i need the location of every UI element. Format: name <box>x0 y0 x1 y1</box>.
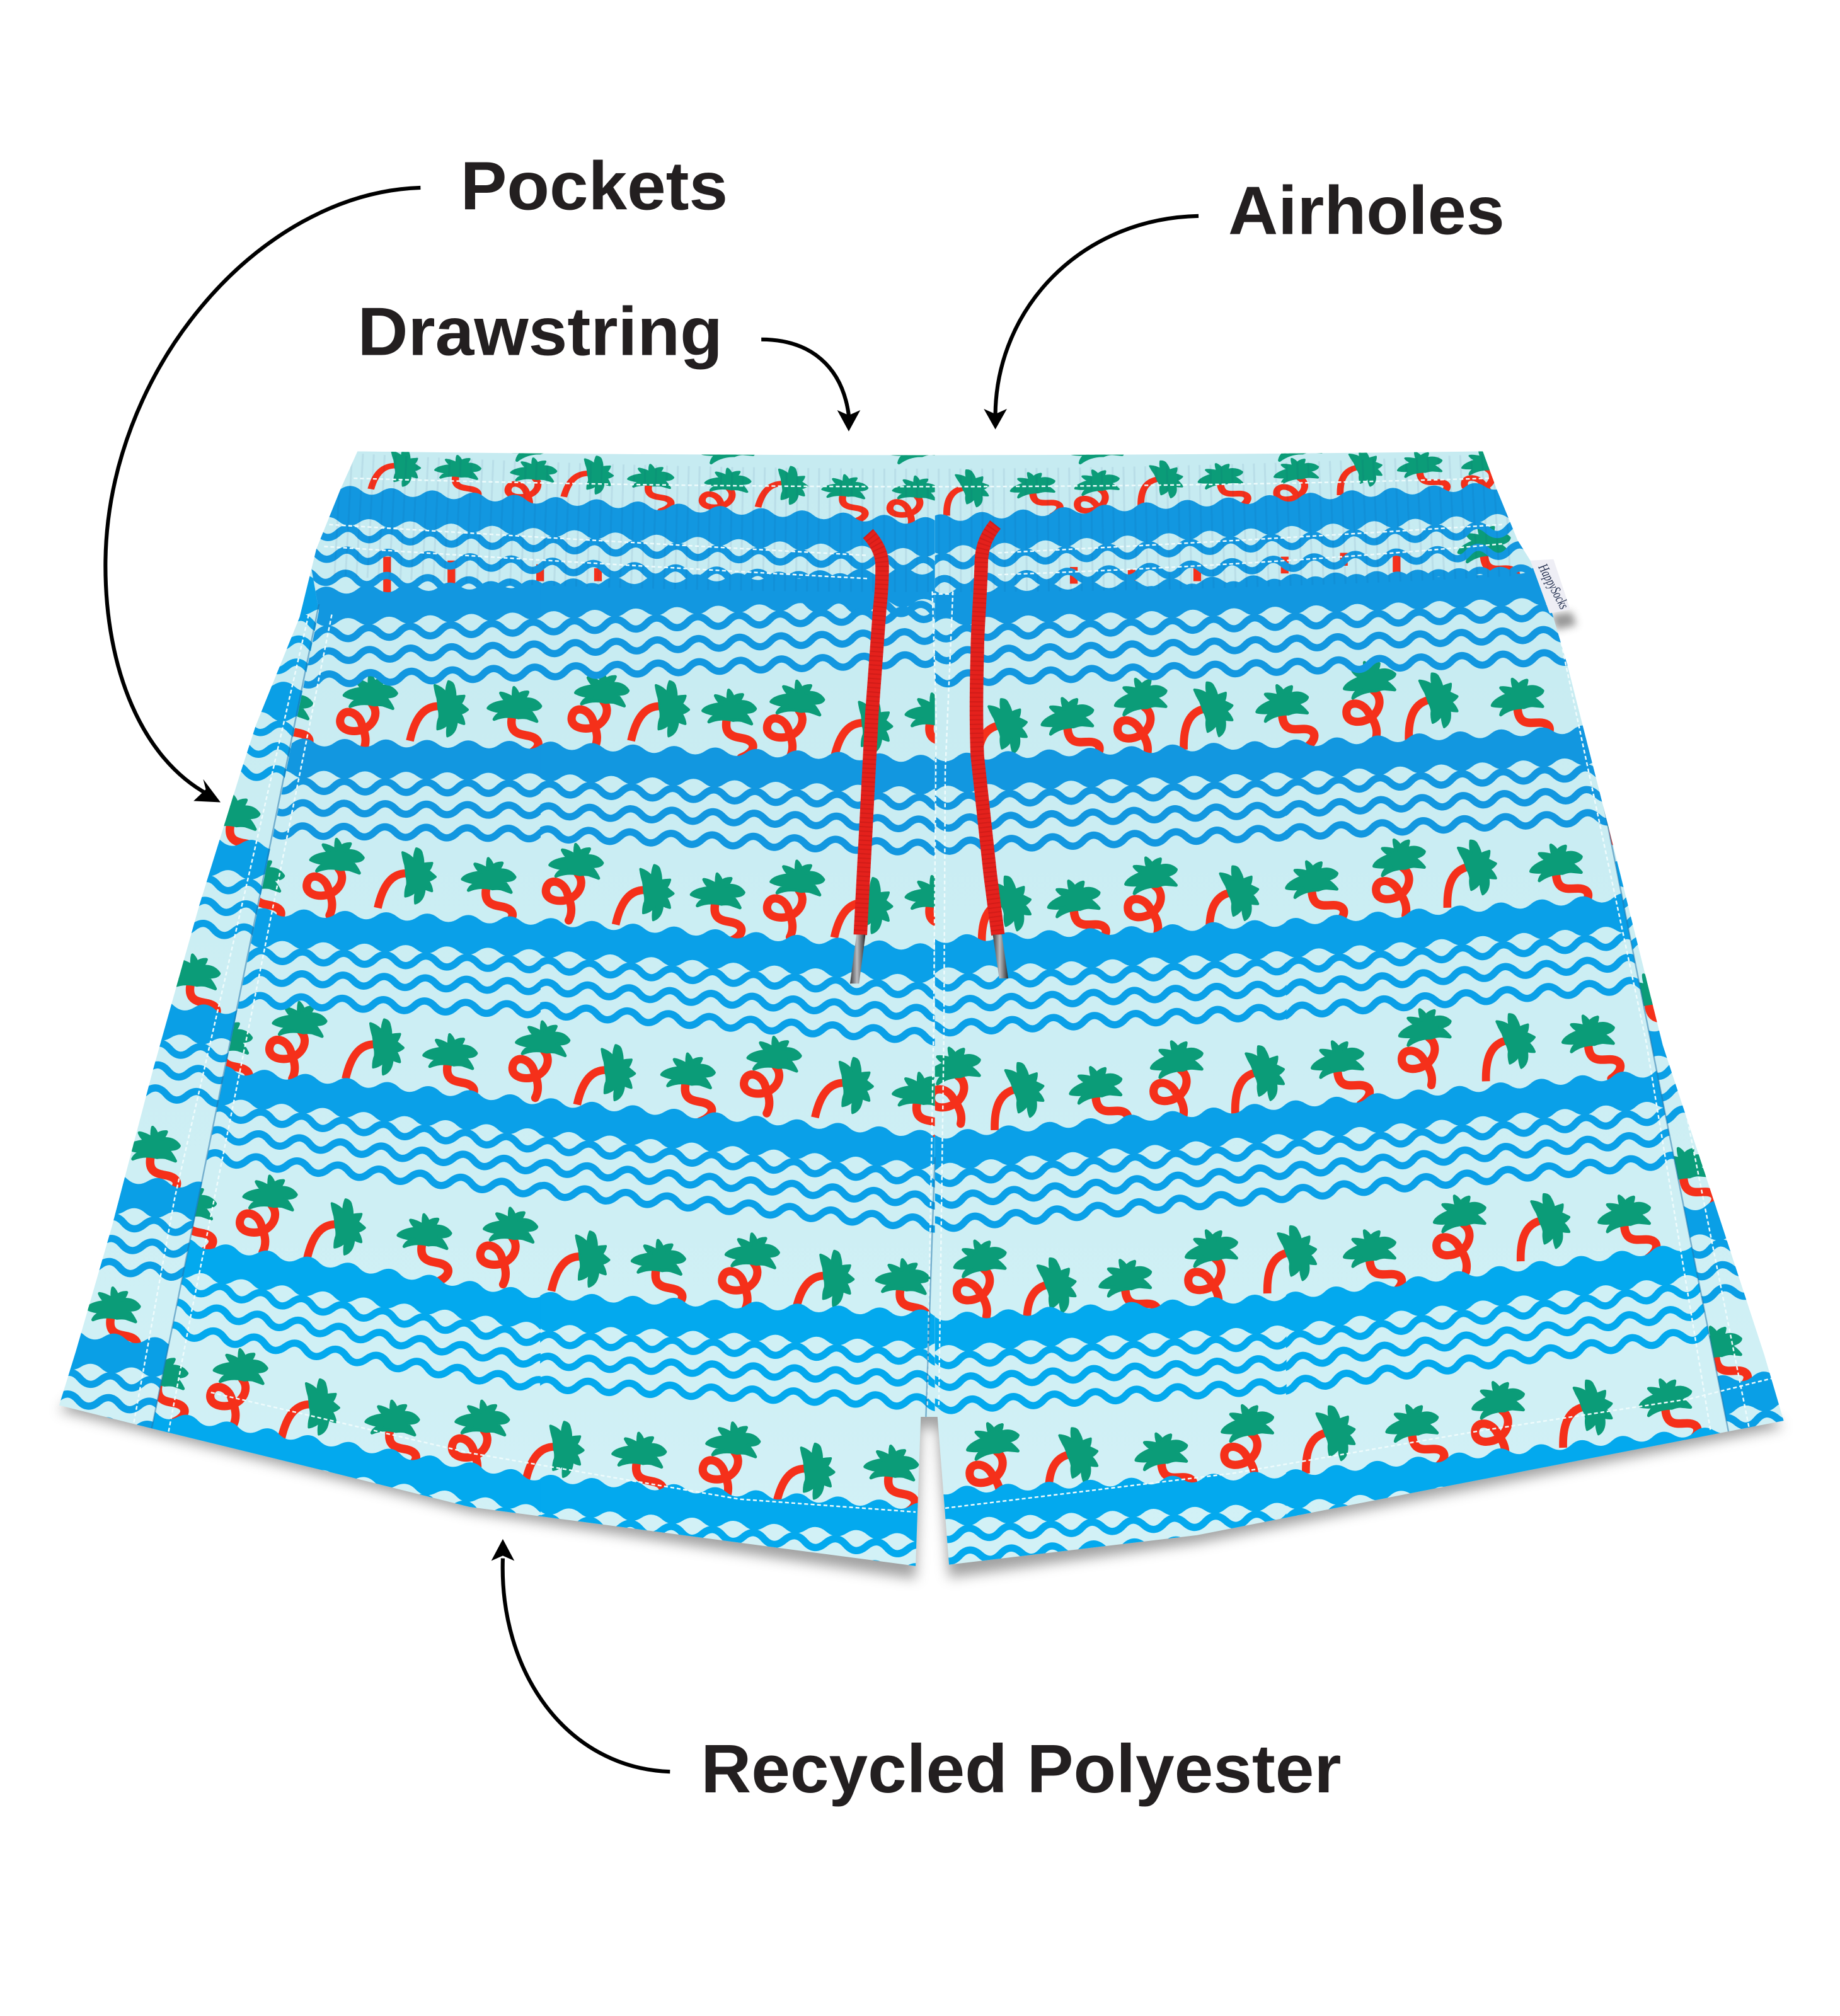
heading: Airholes: Airholes <box>1228 172 1505 249</box>
seams <box>152 604 1730 1438</box>
left aglet <box>850 935 865 983</box>
palms row 2 right <box>982 840 1588 944</box>
right cord <box>976 525 998 935</box>
callout: Drawstring <box>357 293 860 432</box>
brand tag: HappySocks <box>1535 561 1572 612</box>
drawstring <box>850 525 1008 983</box>
right aglet <box>993 935 1008 978</box>
wave stripes right inner <box>0 460 1840 1618</box>
arrow: to pocket <box>105 188 420 802</box>
left cord <box>860 534 882 935</box>
shorts fabric and print <box>59 451 1783 1566</box>
palms row 5 right <box>968 1380 1698 1499</box>
palms row 3 right <box>929 1010 1620 1130</box>
right leg print <box>0 425 1840 1671</box>
palms row 4 right <box>955 1194 1657 1326</box>
palms row waistband right <box>946 425 1516 589</box>
palms row 2 left <box>258 838 935 939</box>
arrow: to airholes <box>984 216 1199 430</box>
heading: Pockets: Pockets <box>461 148 728 225</box>
right side panel print <box>1606 818 1783 1429</box>
red trunk stubs below waistband left <box>387 557 810 593</box>
left side panel print <box>0 484 1238 1513</box>
red trunk stubs below waistband right <box>1074 550 1396 584</box>
arrow: to drawstring <box>761 340 860 432</box>
callout: Airholes <box>984 172 1505 430</box>
arrow: to fabric <box>492 1539 670 1772</box>
palms row waistband left <box>367 452 935 524</box>
drop shadow under hem <box>59 1350 1784 1579</box>
fabric base <box>38 437 1800 1595</box>
palms row 1 left <box>293 675 935 756</box>
wave stripes left outer <box>0 430 1486 1727</box>
heading: Recycled Polyester: Recycled Polyester <box>701 1731 1342 1807</box>
wave stripes left inner <box>0 430 1486 1642</box>
palms row 5 left <box>158 1348 919 1508</box>
palms row 1 right <box>978 663 1550 766</box>
brand tag <box>1531 559 1572 613</box>
infographic: annotated swim shorts <box>57 160 1786 1807</box>
stitching lines <box>134 478 1772 1512</box>
callout: Recycled Polyester <box>492 1539 1342 1807</box>
callout: Pockets <box>105 148 728 802</box>
label tag shadow <box>1551 612 1577 630</box>
heading: Drawstring: Drawstring <box>357 293 723 370</box>
palms row 4 left <box>192 1174 931 1313</box>
shorts garment <box>0 425 1840 1727</box>
palms row 3 left <box>190 998 955 1143</box>
left leg print <box>0 425 1486 1727</box>
wave stripes right outer <box>0 460 1840 1671</box>
waistband gathers <box>337 514 1511 530</box>
